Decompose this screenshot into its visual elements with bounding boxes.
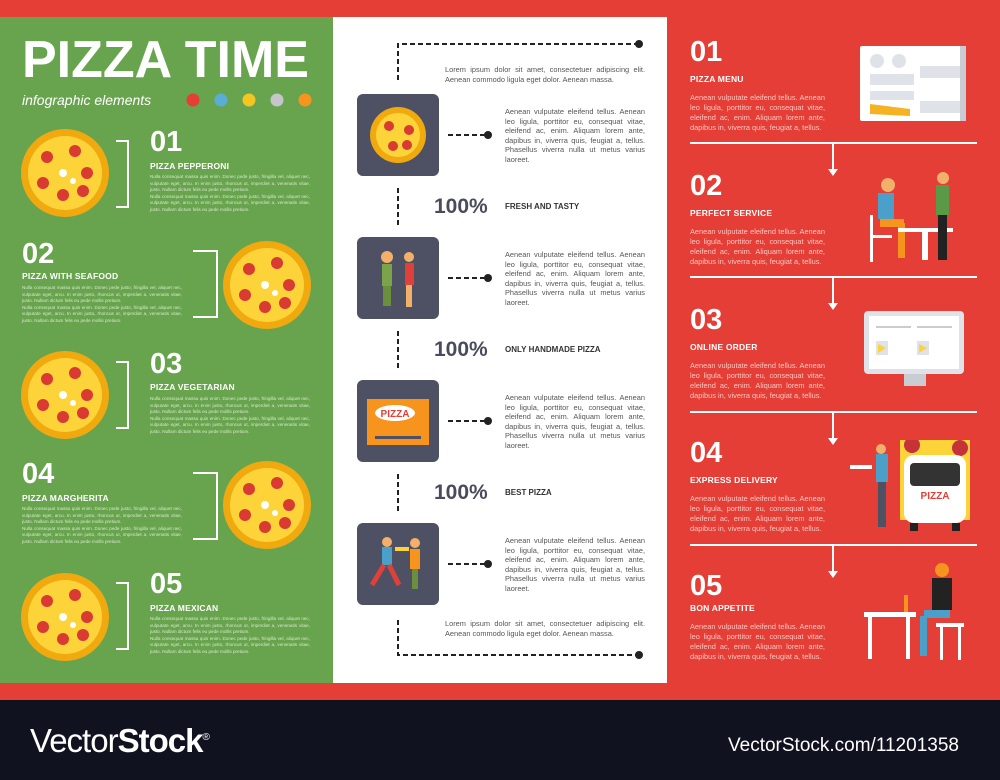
panel: green pizza types <box>0 17 333 683</box>
arrow 3 <box>832 413 834 441</box>
outro text: Lorem ipsum dolor sit amet, consectetuer adipiscing elit. Aenean commodo ligula eget dolor. Aenean massa. <box>445 619 645 638</box>
illustration: delivery van: PIZZA <box>921 491 949 502</box>
step 05 <box>690 570 825 661</box>
item 02: Nulla consequat massa quis enim. Donec pede justo, fringilla vel, aliquet nec, vulputate eget, arcu. In enim justo, rhoncus ut, imperdiet a, venenatis vitae, justo. Nullam dictum felis eu pede mollis pretium. <box>22 305 182 323</box>
icon: pizza mexican <box>21 573 109 661</box>
item 02: Nulla consequat massa quis enim. Donec pede justo, fringilla vel, aliquet nec, vulputate eget, arcu. In enim justo, rhoncus ut, imperdiet a, venenatis vitae, justo. Nullam dictum felis eu pede mollis pretium. <box>22 285 182 303</box>
color dots <box>186 94 312 106</box>
item 04: Nulla consequat massa quis enim. Donec pede justo, fringilla vel, aliquet nec, vulputate eget, arcu. In enim justo, rhoncus ut, imperdiet a, venenatis vitae, justo. Nullam dictum felis eu pede mollis pretium. <box>22 506 182 524</box>
illustration: service <box>870 172 953 262</box>
step 01: Aenean vulputate eleifend tellus. Aenean leo ligula, porttitor eu, consequat vitae, eleifend ac, enim. Aliquam lorem ante, dapibus in, viverra quis, feugiat a, tellus. <box>690 93 825 132</box>
item 04 <box>22 458 218 544</box>
stat: fresh and tasty <box>434 195 579 218</box>
arrow 1 <box>832 144 834 172</box>
stat: only handmade: ONLY HANDMADE PIZZA <box>505 345 601 354</box>
title: PIZZA TIME <box>22 31 309 89</box>
item 01: PIZZA PEPPERONI <box>150 161 229 171</box>
icon: pizza seafood <box>223 241 311 329</box>
item 03: PIZZA VEGETARIAN <box>150 382 235 392</box>
item 01 <box>116 126 310 212</box>
icon box: pizza box <box>357 380 439 462</box>
step 03: ONLINE ORDER <box>690 342 758 352</box>
item 04: 04 <box>22 458 54 490</box>
subtitle: infographic elements <box>22 92 151 108</box>
url: VectorStock.com/11201358 <box>728 735 959 756</box>
step 01: 01 <box>690 36 722 68</box>
icon: pizza pepperoni <box>21 129 109 217</box>
step 04: EXPRESS DELIVERY <box>690 475 778 485</box>
pizza icons left <box>21 129 311 661</box>
text block 2: Aenean vulputate eleifend tellus. Aenean leo ligula, porttitor eu, consequat vitae, eleifend ac, enim. Aliquam lorem ante, dapibus in, viverra quis, feugiat a, tellus. Phasellus viverra nulla ut metus varius laoreet. <box>505 250 645 307</box>
stat: only handmade: 100% <box>434 338 488 361</box>
step 05: 05 <box>690 570 722 602</box>
step 05: Aenean vulputate eleifend tellus. Aenean leo ligula, porttitor eu, consequat vitae, eleifend ac, enim. Aliquam lorem ante, dapibus in, viverra quis, feugiat a, tellus. <box>690 622 825 661</box>
stat: only handmade <box>434 338 601 361</box>
item 01: 01 <box>150 126 182 158</box>
item 05: Nulla consequat massa quis enim. Donec pede justo, fringilla vel, aliquet nec, vulputate eget, arcu. In enim justo, rhoncus ut, imperdiet a, venenatis vitae, justo. Nullam dictum felis eu pede mollis pretium. <box>150 636 310 654</box>
illustration: delivery van <box>850 440 970 531</box>
text block 1: Aenean vulputate eleifend tellus. Aenean leo ligula, porttitor eu, consequat vitae, eleifend ac, enim. Aliquam lorem ante, dapibus in, viverra quis, feugiat a, tellus. Phasellus viverra nulla ut metus varius laoreet. <box>505 107 645 164</box>
step 02: PERFECT SERVICE <box>690 208 772 218</box>
arrow 2 <box>832 278 834 306</box>
step 05: BON APPETITE <box>690 603 755 613</box>
step 03 <box>690 304 825 400</box>
step 01: PIZZA MENU <box>690 74 744 84</box>
step 01 <box>690 36 825 132</box>
step 03: 03 <box>690 304 722 336</box>
panel: white middle timeline <box>333 17 667 683</box>
intro text: Lorem ipsum dolor sit amet, consectetuer adipiscing elit. Aenean commodo ligula eget dolor. Aenean massa. <box>445 65 645 84</box>
icon box: people <box>357 237 439 319</box>
step 02 <box>690 170 825 266</box>
text block 4: Aenean vulputate eleifend tellus. Aenean leo ligula, porttitor eu, consequat vitae, eleifend ac, enim. Aliquam lorem ante, dapibus in, viverra quis, feugiat a, tellus. Phasellus viverra nulla ut metus varius laoreet. <box>505 536 645 593</box>
text block 3: Aenean vulputate eleifend tellus. Aenean leo ligula, porttitor eu, consequat vitae, eleifend ac, enim. Aliquam lorem ante, dapibus in, viverra quis, feugiat a, tellus. Phasellus viverra nulla ut metus varius laoreet. <box>505 393 645 450</box>
item 01: Nulla consequat massa quis enim. Donec pede justo, fringilla vel, aliquet nec, vulputate eget, arcu. In enim justo, rhoncus ut, imperdiet a, venenatis vitae, justo. Nullam dictum felis eu pede mollis pretium. <box>150 194 310 212</box>
arrow 4 <box>832 546 834 574</box>
item 04: Nulla consequat massa quis enim. Donec pede justo, fringilla vel, aliquet nec, vulputate eget, arcu. In enim justo, rhoncus ut, imperdiet a, venenatis vitae, justo. Nullam dictum felis eu pede mollis pretium. <box>22 526 182 544</box>
panel: red service steps <box>690 36 825 661</box>
illustration: menu <box>860 46 966 121</box>
item 03 <box>116 348 310 434</box>
item 02: 02 <box>22 238 54 270</box>
step 04: Aenean vulputate eleifend tellus. Aenean leo ligula, porttitor eu, consequat vitae, eleifend ac, enim. Aliquam lorem ante, dapibus in, viverra quis, feugiat a, tellus. <box>690 494 825 533</box>
item 05 <box>116 568 310 654</box>
icon box: pizza <box>357 94 439 176</box>
item 05: 05 <box>150 568 182 600</box>
logo: VectorStock® <box>30 722 209 759</box>
icon: pizza margherita <box>223 461 311 549</box>
item 05: PIZZA MEXICAN <box>150 603 218 613</box>
dashed connectors <box>397 40 643 659</box>
step 02: 02 <box>690 170 722 202</box>
item 03: Nulla consequat massa quis enim. Donec pede justo, fringilla vel, aliquet nec, vulputate eget, arcu. In enim justo, rhoncus ut, imperdiet a, venenatis vitae, justo. Nullam dictum felis eu pede mollis pretium. <box>150 396 310 414</box>
stat: best pizza <box>434 481 552 504</box>
step 03: Aenean vulputate eleifend tellus. Aenean leo ligula, porttitor eu, consequat vitae, eleifend ac, enim. Aliquam lorem ante, dapibus in, viverra quis, feugiat a, tellus. <box>690 361 825 400</box>
item 04: PIZZA MARGHERITA <box>22 493 109 503</box>
item 03: 03 <box>150 348 182 380</box>
icon box: pizza box: PIZZA <box>381 409 409 420</box>
footer watermark band <box>0 700 1000 780</box>
step 04: 04 <box>690 437 722 469</box>
illustration: monitor <box>864 311 964 386</box>
item 02: PIZZA WITH SEAFOOD <box>22 271 118 281</box>
illustration: diner <box>864 563 964 660</box>
stat: fresh and tasty: FRESH AND TASTY <box>505 202 579 211</box>
item 02 <box>22 238 218 323</box>
item 03: Nulla consequat massa quis enim. Donec pede justo, fringilla vel, aliquet nec, vulputate eget, arcu. In enim justo, rhoncus ut, imperdiet a, venenatis vitae, justo. Nullam dictum felis eu pede mollis pretium. <box>150 416 310 434</box>
icon box: delivery handoff <box>357 523 439 605</box>
item 05: Nulla consequat massa quis enim. Donec pede justo, fringilla vel, aliquet nec, vulputate eget, arcu. In enim justo, rhoncus ut, imperdiet a, venenatis vitae, justo. Nullam dictum felis eu pede mollis pretium. <box>150 616 310 634</box>
item 01: Nulla consequat massa quis enim. Donec pede justo, fringilla vel, aliquet nec, vulputate eget, arcu. In enim justo, rhoncus ut, imperdiet a, venenatis vitae, justo. Nullam dictum felis eu pede mollis pretium. <box>150 174 310 192</box>
stat: best pizza: BEST PIZZA <box>505 488 552 497</box>
step 04 <box>690 437 825 533</box>
icon: pizza vegetarian <box>21 351 109 439</box>
step 02: Aenean vulputate eleifend tellus. Aenean leo ligula, porttitor eu, consequat vitae, eleifend ac, enim. Aliquam lorem ante, dapibus in, viverra quis, feugiat a, tellus. <box>690 227 825 266</box>
stat: best pizza: 100% <box>434 481 488 504</box>
stat: fresh and tasty: 100% <box>434 195 488 218</box>
